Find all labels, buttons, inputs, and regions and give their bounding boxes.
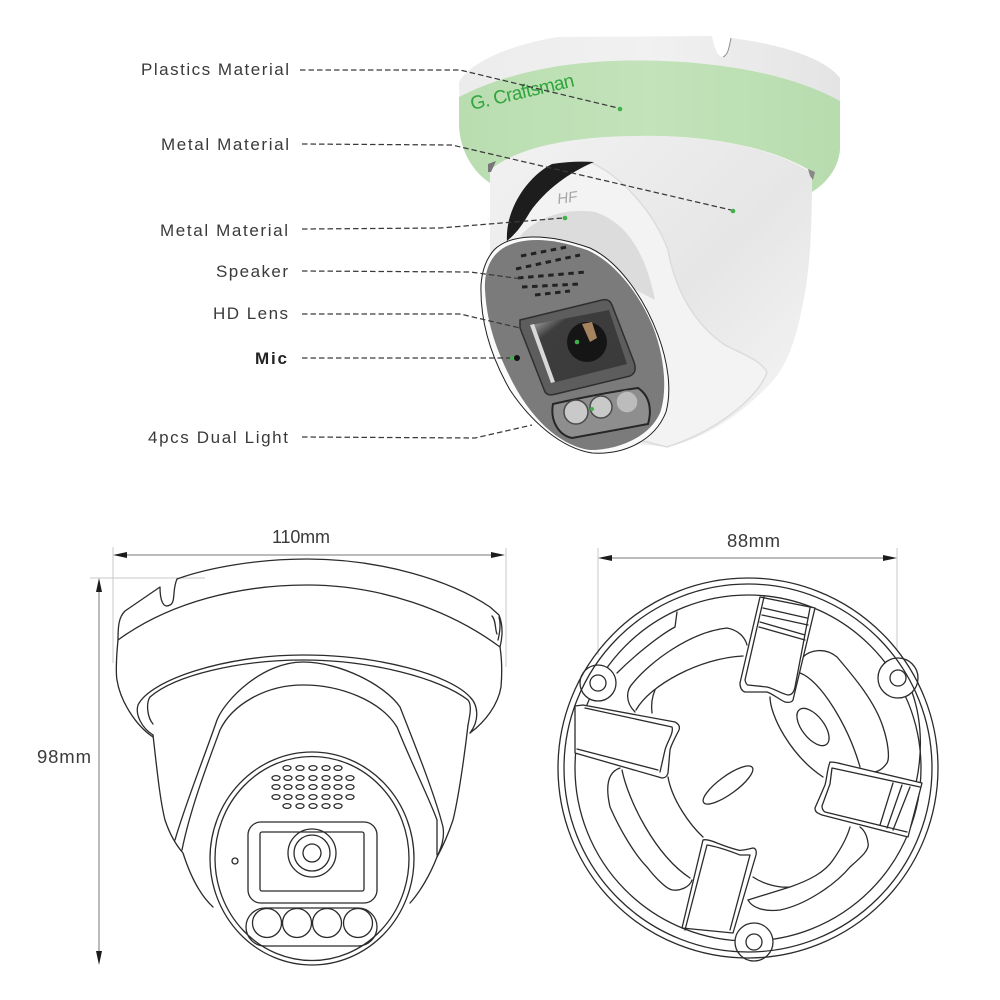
upper-left inner arc — [636, 656, 743, 713]
lower-left inner arcs — [622, 770, 703, 878]
dome lower skirt — [116, 640, 502, 737]
callout: mic — [255, 349, 514, 368]
neck inner arc — [182, 685, 437, 855]
dome side clip — [492, 616, 500, 640]
skirt second arc — [148, 660, 470, 725]
upper-left pocket — [628, 628, 747, 712]
lens window — [260, 832, 364, 891]
lower-right pocket — [748, 827, 868, 911]
speaker grille — [272, 766, 354, 808]
callout: plastics material — [141, 60, 622, 111]
face plate inner — [215, 756, 409, 960]
skirt inner arcs — [137, 655, 477, 735]
lens — [567, 322, 607, 362]
speaker holes — [516, 247, 586, 295]
dome white top ring — [459, 36, 840, 125]
lens housing — [248, 822, 377, 903]
light bar — [552, 388, 650, 438]
dimension: height 98mm — [37, 578, 205, 965]
neck outer arc — [175, 662, 443, 857]
light bar — [246, 908, 377, 946]
dimension: width 110mm — [113, 527, 506, 667]
face plate outer — [210, 752, 414, 965]
mic hole — [514, 355, 520, 361]
screw boss right — [878, 658, 918, 698]
lens copper reflection — [582, 322, 597, 342]
face plate — [485, 240, 664, 450]
callout: speaker — [216, 262, 522, 281]
upper-left slot — [617, 612, 677, 673]
camera body — [490, 136, 812, 447]
lens window frame — [520, 300, 635, 395]
callout: metal material (body) — [161, 135, 735, 213]
dimension: height 98mm: 98mm — [37, 746, 91, 767]
callout: HD lens: HD Lens — [213, 304, 288, 323]
neck dark slot — [507, 162, 594, 241]
dome green band — [459, 60, 840, 192]
dome top ring — [118, 559, 502, 647]
lens window glass — [531, 310, 627, 383]
right mount tab — [808, 169, 815, 180]
glass edge highlight — [530, 324, 555, 383]
right inner ring arc — [910, 692, 920, 805]
line drawing: camera front — [116, 559, 502, 965]
callout: plastics material: Plastics Material — [141, 60, 289, 79]
callout: mic: Mic — [255, 349, 287, 368]
LEDs — [564, 391, 638, 424]
base outer rings — [558, 578, 938, 958]
callout: metal material (head) — [160, 216, 567, 240]
top tab — [740, 597, 815, 702]
head shading — [520, 211, 655, 300]
right tab — [815, 762, 922, 837]
photo: dome camera — [459, 36, 840, 453]
callout: 4pcs dual light: 4pcs Dual Light — [148, 428, 288, 447]
bottom tab — [682, 840, 756, 933]
centre slot hole — [698, 760, 758, 810]
left mount tab — [488, 161, 496, 172]
upper-right pocket — [803, 651, 888, 772]
dimension: base diameter 88mm — [598, 530, 897, 655]
screw boss bottom — [735, 923, 773, 961]
callout: HD lens — [213, 304, 579, 344]
turret body sides — [153, 725, 468, 907]
lower-left pocket — [608, 768, 692, 890]
callout: 4pcs dual light — [148, 407, 594, 447]
notch shadow — [723, 38, 731, 57]
lower-right inner arcs — [748, 827, 850, 900]
mounting hole right — [791, 703, 835, 751]
inner ring — [575, 595, 921, 941]
dimension: width 110mm: 110mm — [272, 527, 330, 547]
swivel head — [507, 162, 767, 447]
line drawing: mounting base — [558, 578, 938, 961]
upper-right inner arcs — [770, 673, 860, 777]
lens rings — [288, 829, 336, 877]
left tab — [575, 705, 679, 778]
callout: speaker: Speaker — [216, 262, 288, 281]
neck mark: HF — [556, 188, 579, 208]
callout: metal material (head): Metal Material — [160, 221, 288, 240]
face plate rim — [481, 237, 669, 453]
logo: G. Craftsman: G. Craftsman — [468, 71, 576, 115]
screw boss left — [580, 665, 616, 701]
callout: metal material (body): Metal Material — [161, 135, 289, 154]
dimension: base diameter 88mm: 88mm — [727, 530, 780, 551]
mic hole — [232, 858, 238, 864]
LED circles — [252, 908, 372, 938]
